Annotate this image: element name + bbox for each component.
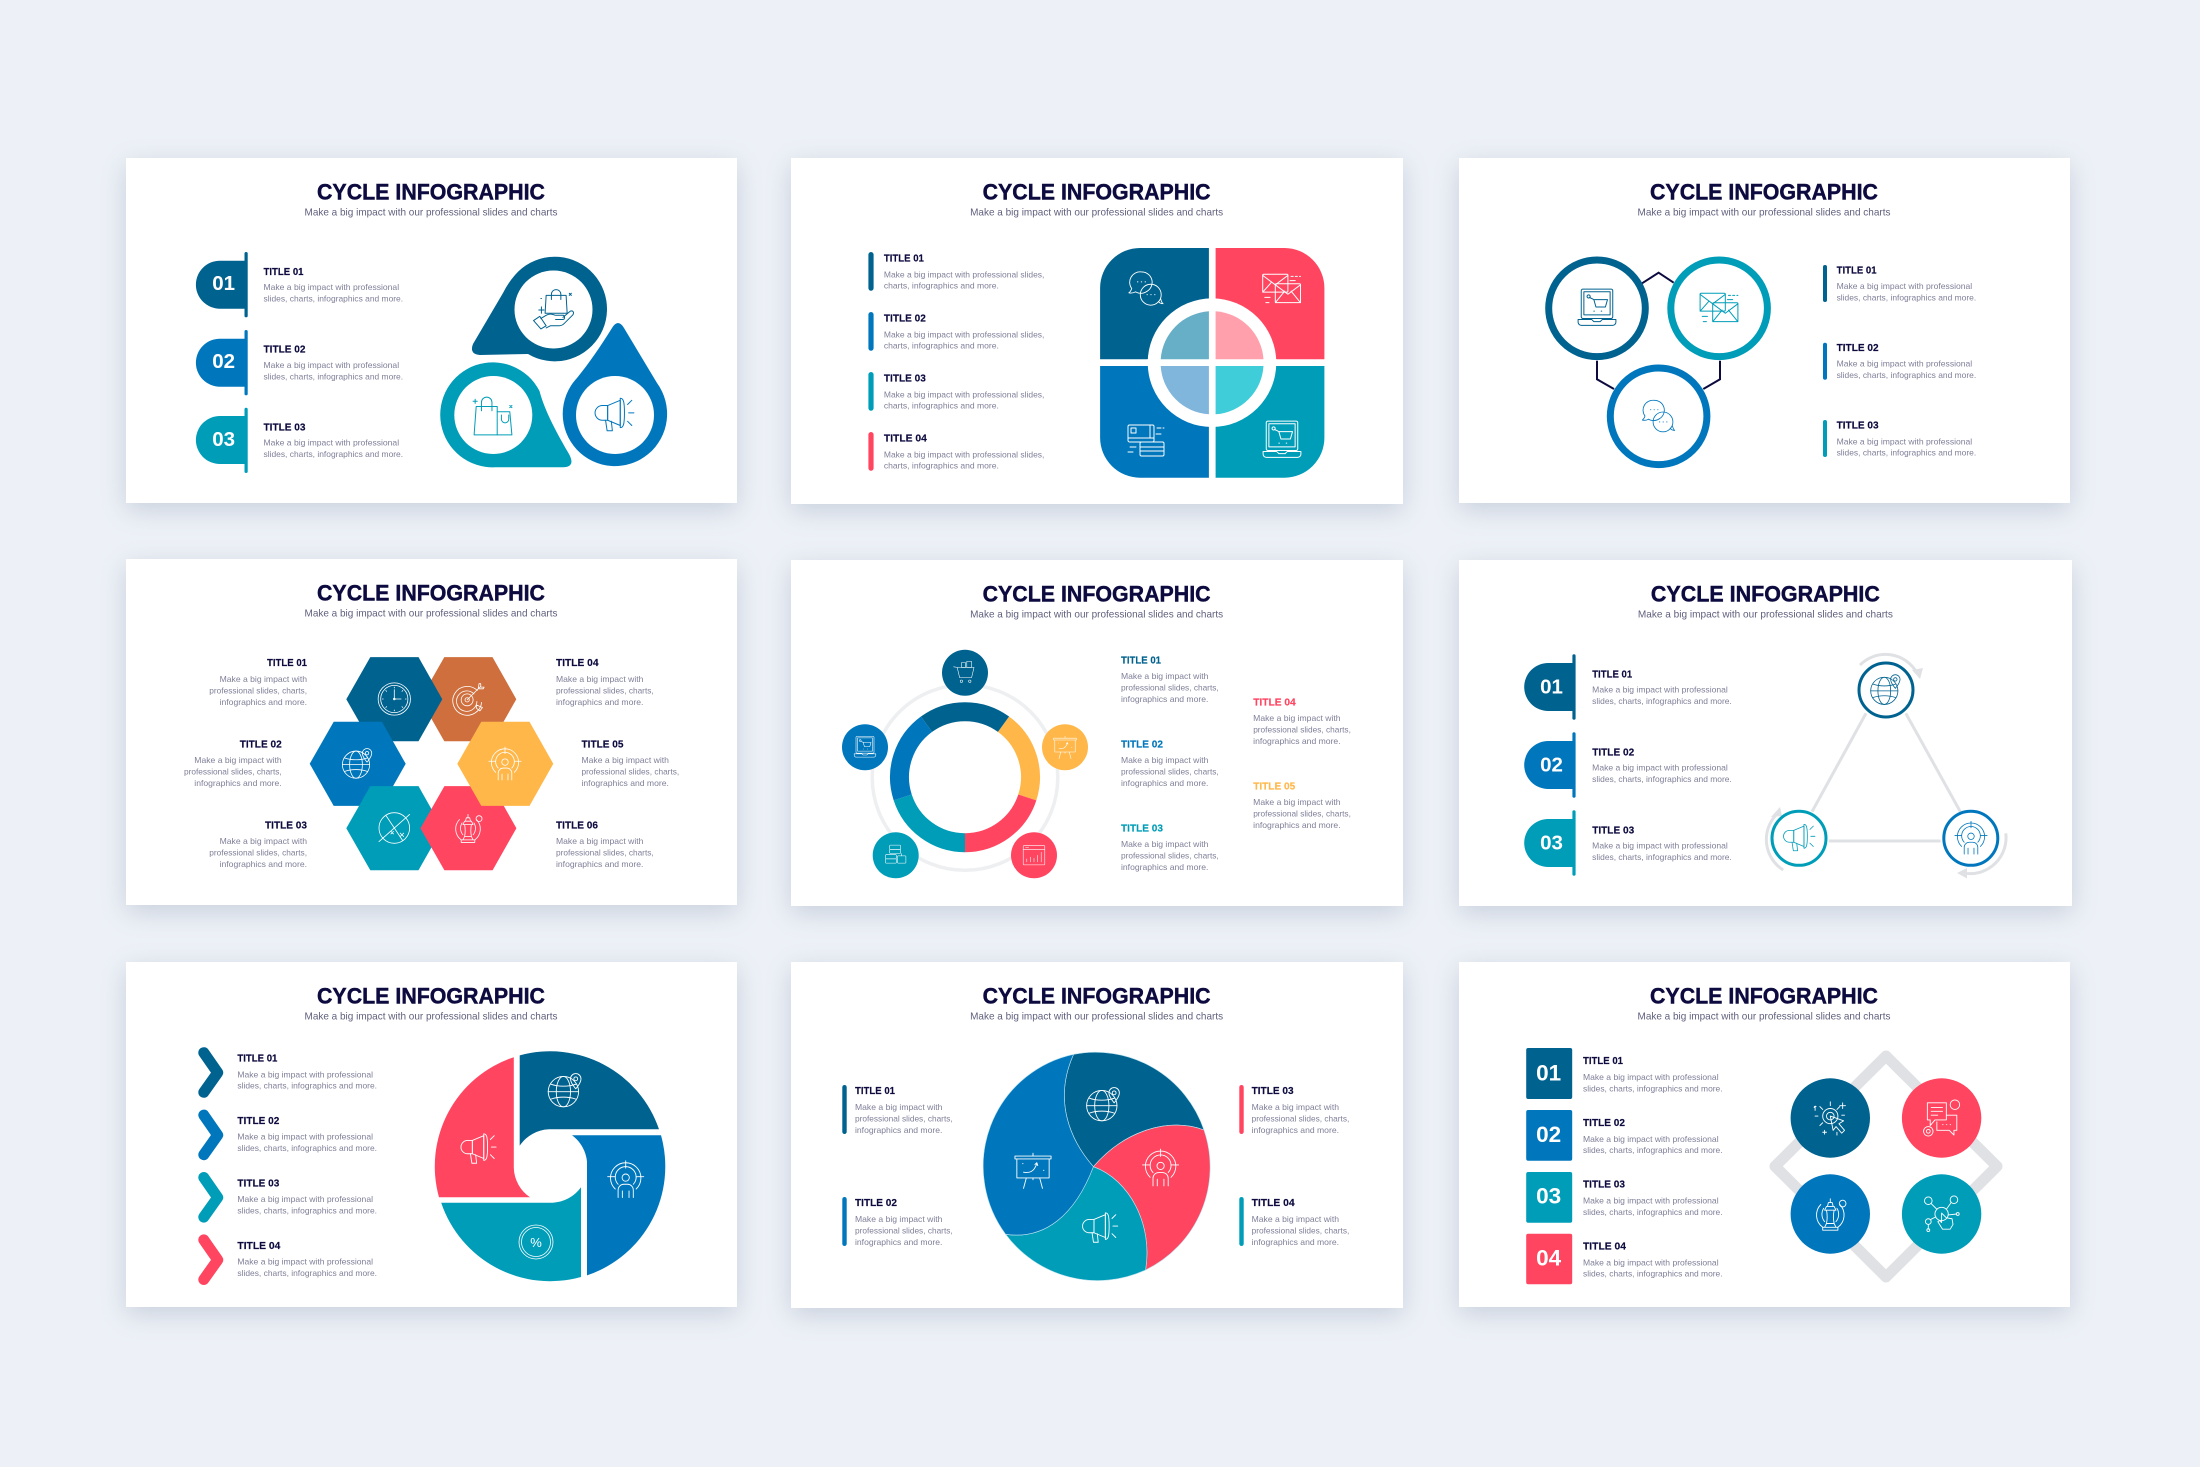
text block: title 03	[1239, 1085, 1349, 1135]
number square 01: 01	[1536, 1060, 1561, 1085]
number badge 02: 02	[1540, 754, 1563, 777]
heading	[1638, 983, 1890, 1022]
text block: title 03: TITLE 03	[264, 421, 306, 433]
text block: title 06: professional slides, charts,	[556, 847, 654, 857]
text block: title 03: Make a big impact with	[220, 836, 307, 846]
text block: title 01: TITLE 01	[237, 1053, 278, 1065]
number square 01	[1526, 1048, 1572, 1099]
text block: title 04: charts, infographics and more.	[884, 461, 999, 471]
icon: globe	[342, 748, 372, 778]
text block: title 01: slides, charts, infographics and more.	[1592, 696, 1732, 706]
heading	[304, 580, 558, 619]
text block: title 05: TITLE 05	[582, 738, 624, 750]
heading: CYCLE INFOGRAPHIC	[983, 179, 1211, 204]
text block: title 01: slides, charts, infographics and more.	[1837, 292, 1976, 302]
text block: title 01: TITLE 01	[855, 1085, 895, 1097]
text block: title 03: Make a big impact with professional	[1583, 1196, 1719, 1206]
text block: title 04: Make a big impact with professional	[237, 1256, 373, 1266]
text block: title 03: slides, charts, infographics and more.	[264, 449, 403, 459]
text block: title 03: TITLE 03	[237, 1178, 280, 1190]
text block: title 02: slides, charts, infographics and more.	[1583, 1145, 1723, 1155]
node: social chat	[1902, 1078, 1981, 1158]
heading: Make a big impact with our professional slides and charts	[970, 608, 1223, 620]
text block: title 03	[1592, 824, 1732, 862]
text block: title 04: slides, charts, infographics and more.	[237, 1268, 377, 1278]
text block: title 02: Make a big impact with professional	[237, 1132, 373, 1142]
text block: title 02: infographics and more.	[1121, 778, 1208, 788]
number badge 01	[1524, 654, 1576, 720]
text block: title 04	[1253, 697, 1351, 746]
icon: globe	[548, 1074, 581, 1107]
text block: title 02	[868, 312, 1044, 351]
drop: teal left	[440, 362, 571, 467]
text block: title 01	[1121, 655, 1219, 704]
panel: spiral pie slide	[126, 962, 737, 1307]
text block: title 01: TITLE 01	[1837, 264, 1877, 276]
text block: title 03: charts, infographics and more.	[884, 401, 999, 411]
text block: title 03: TITLE 03	[1252, 1085, 1294, 1097]
chart: quadrant square	[1100, 248, 1324, 478]
text block: title 02	[264, 344, 403, 381]
text block: title 02: slides, charts, infographics and more.	[264, 371, 403, 381]
text block: title 01: TITLE 01	[884, 253, 924, 265]
text block: title 03: Make a big impact with professional	[1837, 436, 1972, 446]
text block: title 02: TITLE 02	[1121, 739, 1163, 751]
text block: title 02: slides, charts, infographics and more.	[1592, 774, 1732, 784]
text block: title 04	[237, 1240, 377, 1278]
text block: title 04: TITLE 04	[237, 1240, 281, 1252]
icon: dart target	[453, 684, 484, 715]
chart: spiral pie	[435, 1051, 665, 1281]
text block: title 02: TITLE 02	[1837, 342, 1879, 354]
text block: title 03: slides, charts, infographics and more.	[237, 1206, 377, 1216]
node: megaphone	[1772, 811, 1826, 865]
text block: title 05: infographics and more.	[1253, 820, 1341, 830]
text block: title 03: Make a big impact with professional	[237, 1194, 373, 1204]
heading: CYCLE INFOGRAPHIC	[317, 179, 545, 204]
text block: title 02: Make a big impact with	[1121, 755, 1209, 765]
text block: title 01: Make a big impact with professional	[1837, 281, 1972, 291]
text block: title 01: Make a big impact with professional	[1592, 684, 1728, 694]
text block: title 02: TITLE 02	[237, 1115, 280, 1127]
text block: title 02: TITLE 02	[240, 738, 282, 750]
icon: envelopes	[1700, 293, 1738, 322]
heading: CYCLE INFOGRAPHIC	[317, 580, 545, 605]
heading	[1638, 179, 1890, 218]
panel: triangle cycle slide	[1459, 560, 2072, 906]
text block: title 04: Make a big impact with professional	[1583, 1257, 1719, 1267]
text block: title 03: TITLE 03	[884, 373, 926, 385]
text block: title 05: TITLE 05	[1253, 781, 1295, 793]
number square 04	[1526, 1234, 1572, 1284]
text block: title 03: TITLE 03	[1121, 823, 1163, 835]
text block: title 03	[1121, 823, 1219, 872]
text block: title 02: Make a big impact with professional	[1583, 1134, 1719, 1144]
arrow: top arc	[1860, 654, 1923, 679]
text block: title 01	[209, 657, 307, 707]
text block: title 01: Make a big impact with professional	[264, 282, 399, 292]
text block: title 04: Make a big impact with professional slides,	[884, 449, 1044, 459]
icon: percent gauge	[519, 1225, 553, 1259]
text block: title 04: TITLE 04	[884, 433, 927, 445]
text block: title 01	[842, 1085, 953, 1135]
text block: title 01: Make a big impact with	[1121, 671, 1209, 681]
text block: title 04: Make a big impact with	[1252, 1214, 1339, 1224]
arrow: chevron 04	[204, 1240, 218, 1280]
text block: title 03: Make a big impact with	[1121, 839, 1209, 849]
text block: title 04: TITLE 04	[1252, 1197, 1295, 1209]
panel: ring with satellites slide	[791, 560, 1403, 906]
text block: title 04: professional slides, charts,	[1252, 1225, 1349, 1235]
text block: title 01: TITLE 01	[1121, 655, 1161, 667]
number badge 01	[196, 252, 248, 317]
text block: title 03: professional slides, charts,	[1252, 1113, 1349, 1123]
node: target	[1944, 811, 1998, 865]
text block: title 05: Make a big impact with	[1253, 797, 1341, 807]
text block: title 03: slides, charts, infographics and more.	[1583, 1207, 1723, 1217]
text block: title 04: TITLE 04	[1253, 697, 1296, 709]
text block: title 04	[1239, 1197, 1349, 1247]
text block: title 04: slides, charts, infographics and more.	[1583, 1269, 1723, 1279]
text block: title 03: Make a big impact with	[1252, 1102, 1339, 1112]
heading: CYCLE INFOGRAPHIC	[317, 983, 545, 1008]
panel: rounded quadrant slide	[791, 158, 1403, 504]
number square 03	[1526, 1172, 1572, 1223]
heading: Make a big impact with our professional slides and charts	[970, 1010, 1223, 1022]
icon: chat bubbles	[1642, 400, 1675, 432]
text block: title 05: infographics and more.	[582, 778, 669, 788]
arrow: left arc	[1766, 807, 1783, 870]
satellite: coins	[873, 832, 919, 878]
text block: title 03	[868, 372, 1044, 411]
text block: title 01: TITLE 01	[267, 657, 307, 669]
panel: hexagon ring slide	[126, 559, 737, 905]
arrow: chevron 01	[204, 1053, 218, 1092]
text block: title 01: professional slides, charts,	[1121, 682, 1219, 692]
text block: title 02: TITLE 02	[264, 344, 306, 356]
icon: target person	[1143, 1149, 1179, 1186]
text block: title 04: infographics and more.	[556, 697, 643, 707]
text block: title 03: TITLE 03	[1592, 824, 1634, 836]
chart: triangle cycle	[1766, 654, 2006, 878]
text block: title 01	[237, 1053, 377, 1091]
text block: title 02: infographics and more.	[194, 778, 282, 788]
text block: title 03: TITLE 03	[265, 819, 307, 831]
text block: title 01: infographics and more.	[1121, 694, 1208, 704]
text block: title 03: infographics and more.	[220, 859, 307, 869]
heading: CYCLE INFOGRAPHIC	[983, 983, 1211, 1008]
text block: title 01: Make a big impact with professional slides,	[884, 269, 1044, 279]
text block: title 06: TITLE 06	[556, 819, 598, 831]
text block: title 01: TITLE 01	[1583, 1055, 1623, 1067]
number badge 01: 01	[1540, 676, 1563, 699]
node: click	[1791, 1078, 1870, 1158]
node: network	[1902, 1174, 1981, 1254]
text block: title 03: TITLE 03	[1837, 420, 1879, 432]
icon: hand with bag	[534, 290, 573, 329]
drop: dark top	[472, 257, 607, 361]
text block: title 03: slides, charts, infographics and more.	[1837, 448, 1976, 458]
text block: title 01	[868, 252, 1044, 291]
text block: title 03: Make a big impact with professional	[264, 438, 399, 448]
icon: envelopes	[1263, 274, 1300, 303]
text block: title 03: professional slides, charts,	[1121, 850, 1219, 860]
text block: title 05	[1253, 781, 1351, 830]
text block: title 05: Make a big impact with	[582, 755, 669, 765]
text block: title 02: slides, charts, infographics and more.	[237, 1143, 377, 1153]
drop: blue right	[563, 323, 667, 466]
text block: title 03: professional slides, charts,	[209, 847, 307, 857]
heading	[970, 581, 1223, 620]
icon: target person	[608, 1160, 644, 1198]
text block: title 01	[1823, 264, 1976, 302]
text block: title 04	[556, 657, 654, 707]
number badge 03: 03	[1540, 832, 1563, 855]
text block: title 02: slides, charts, infographics and more.	[1837, 370, 1976, 380]
text block: title 01: TITLE 01	[1592, 668, 1632, 680]
heading: CYCLE INFOGRAPHIC	[1650, 179, 1878, 204]
chart: linked rings	[1549, 260, 1767, 465]
text block: title 02: professional slides, charts,	[1121, 766, 1219, 776]
text block: title 01	[264, 266, 403, 304]
text block: title 02: TITLE 02	[1592, 746, 1634, 758]
heading: Make a big impact with our professional slides and charts	[1638, 1010, 1890, 1022]
text block: title 04: professional slides, charts,	[1253, 724, 1351, 734]
heading: Make a big impact with our professional slides and charts	[304, 206, 558, 218]
icon: megaphone	[461, 1134, 496, 1163]
number badge 02: 02	[212, 350, 235, 373]
heading: Make a big impact with our professional slides and charts	[304, 607, 558, 619]
text block: title 04: TITLE 04	[556, 657, 599, 669]
text block: title 01: Make a big impact with professional	[1583, 1072, 1719, 1082]
heading	[304, 179, 558, 218]
text block: title 04: professional slides, charts,	[556, 685, 654, 695]
text block: title 01: charts, infographics and more.	[884, 281, 999, 291]
icon: shopping bags	[473, 397, 512, 435]
text block: title 02: Make a big impact with	[194, 755, 282, 765]
icon: percent gauge: %	[530, 1235, 542, 1250]
number badge 03	[196, 408, 248, 473]
number badge 01: 01	[212, 272, 235, 295]
heading: Make a big impact with our professional slides and charts	[1638, 608, 1893, 620]
text block: title 02	[1121, 739, 1219, 788]
arrow: chevron 02	[204, 1115, 218, 1155]
text block: title 05: professional slides, charts,	[582, 766, 679, 776]
icon: laptop cart	[1578, 289, 1616, 325]
number badge 02	[196, 330, 248, 395]
text block: title 01: Make a big impact with	[220, 674, 307, 684]
chart: diamond with circles	[1775, 1056, 1997, 1277]
icon: clock	[378, 683, 410, 715]
satellite: chart	[1011, 832, 1057, 878]
text block: title 02: TITLE 02	[884, 313, 926, 325]
number badge 02	[1524, 732, 1576, 798]
text block: title 02: professional slides, charts,	[855, 1225, 953, 1235]
text block: title 04	[1583, 1240, 1723, 1279]
chart: six hexagons	[310, 657, 553, 870]
text block: title 01: professional slides, charts,	[855, 1113, 953, 1123]
text block: title 02: TITLE 02	[1583, 1117, 1625, 1129]
panel: drops cycle slide	[126, 158, 737, 503]
icon: target person	[489, 747, 521, 780]
text block: title 05	[582, 738, 679, 788]
text block: title 01: slides, charts, infographics and more.	[264, 294, 403, 304]
number badge 03	[1524, 810, 1576, 876]
chart: swirl pie	[983, 1052, 1210, 1281]
text block: title 02: Make a big impact with professional	[264, 360, 399, 370]
text block: title 02: TITLE 02	[855, 1197, 897, 1209]
arrow: right arc	[1957, 833, 2006, 878]
heading: CYCLE INFOGRAPHIC	[983, 581, 1211, 606]
text block: title 01: professional slides, charts,	[209, 685, 307, 695]
panel: swirl pie slide	[791, 962, 1403, 1308]
heading: Make a big impact with our professional slides and charts	[970, 206, 1223, 218]
heading	[970, 179, 1223, 218]
text block: title 01: TITLE 01	[264, 266, 304, 278]
arrow: chevron 03	[204, 1178, 218, 1217]
text block: title 03	[1823, 420, 1976, 458]
text block: title 01: infographics and more.	[855, 1125, 942, 1135]
text block: title 02: Make a big impact with professional slides,	[884, 329, 1044, 339]
text block: title 02	[237, 1115, 377, 1153]
satellite: board	[1042, 724, 1088, 770]
text block: title 02: Make a big impact with professional	[1592, 762, 1728, 772]
node: globe	[1859, 663, 1913, 717]
icon: chess piece	[456, 814, 482, 842]
icon: megaphone	[1083, 1213, 1118, 1242]
heading: Make a big impact with our professional slides and charts	[1638, 206, 1890, 218]
number square 02	[1526, 1110, 1572, 1161]
satellite: laptop	[842, 724, 888, 770]
heading	[1638, 581, 1893, 620]
text block: title 03: infographics and more.	[1252, 1125, 1339, 1135]
satellite: cart	[942, 650, 988, 696]
number square 02: 02	[1536, 1122, 1561, 1147]
text block: title 06	[556, 819, 654, 869]
chart: three drops	[440, 257, 667, 467]
text block: title 03: infographics and more.	[1121, 862, 1208, 872]
text block: title 05: professional slides, charts,	[1253, 808, 1351, 818]
text block: title 04: infographics and more.	[1253, 736, 1341, 746]
node: chess	[1791, 1174, 1870, 1254]
text block: title 02	[1823, 342, 1976, 380]
text block: title 02: Make a big impact with professional	[1837, 359, 1972, 369]
number square 04: 04	[1536, 1246, 1562, 1271]
panel: linked rings slide	[1459, 158, 2070, 503]
text block: title 01	[1592, 668, 1732, 706]
icon: chat bubbles	[1129, 272, 1163, 305]
text block: title 03	[1583, 1179, 1723, 1217]
heading: Make a big impact with our professional slides and charts	[304, 1010, 558, 1022]
text block: title 02: infographics and more.	[855, 1237, 942, 1247]
text block: title 01: slides, charts, infographics and more.	[1583, 1083, 1723, 1093]
heading	[304, 983, 558, 1022]
number badge 03: 03	[212, 428, 235, 451]
text block: title 04: infographics and more.	[1252, 1237, 1339, 1247]
text block: title 02: charts, infographics and more.	[884, 341, 999, 351]
text block: title 03: slides, charts, infographics and more.	[1592, 852, 1732, 862]
text block: title 01: infographics and more.	[220, 697, 307, 707]
heading	[970, 983, 1223, 1022]
text block: title 01: slides, charts, infographics and more.	[237, 1081, 377, 1091]
text block: title 01: Make a big impact with	[855, 1102, 943, 1112]
text block: title 04: TITLE 04	[1583, 1240, 1626, 1252]
text block: title 01	[1583, 1055, 1723, 1093]
text block: title 03: Make a big impact with professional slides,	[884, 389, 1044, 399]
chart: five segment ring	[842, 650, 1088, 878]
text block: title 03: TITLE 03	[1583, 1179, 1625, 1191]
text block: title 06: Make a big impact with	[556, 836, 644, 846]
text block: title 02	[184, 738, 282, 788]
text block: title 02: professional slides, charts,	[184, 766, 282, 776]
text block: title 04	[868, 432, 1044, 471]
number square 03: 03	[1536, 1184, 1561, 1209]
text block: title 03	[264, 421, 403, 459]
icon: strategy ball	[379, 813, 410, 843]
icon: presentation board	[1015, 1153, 1051, 1188]
panel: diamond circles slide	[1459, 962, 2070, 1307]
text block: title 03	[209, 819, 307, 869]
text block: title 04: Make a big impact with	[556, 674, 644, 684]
icon: laptop cart	[1263, 421, 1301, 457]
icon: globe	[1087, 1088, 1119, 1121]
text block: title 01: Make a big impact with professional	[237, 1069, 373, 1079]
text block: title 02	[1583, 1117, 1723, 1155]
text block: title 02	[842, 1197, 953, 1247]
icon: credit cards	[1128, 425, 1164, 456]
text block: title 06: infographics and more.	[556, 859, 643, 869]
text block: title 02	[1592, 746, 1732, 784]
text block: title 02: Make a big impact with	[855, 1214, 943, 1224]
text block: title 03	[237, 1178, 377, 1216]
icon: megaphone	[595, 398, 634, 431]
heading: CYCLE INFOGRAPHIC	[1651, 581, 1880, 606]
text block: title 03: Make a big impact with professional	[1592, 840, 1728, 850]
heading: CYCLE INFOGRAPHIC	[1650, 983, 1878, 1008]
text block: title 04: Make a big impact with	[1253, 713, 1341, 723]
